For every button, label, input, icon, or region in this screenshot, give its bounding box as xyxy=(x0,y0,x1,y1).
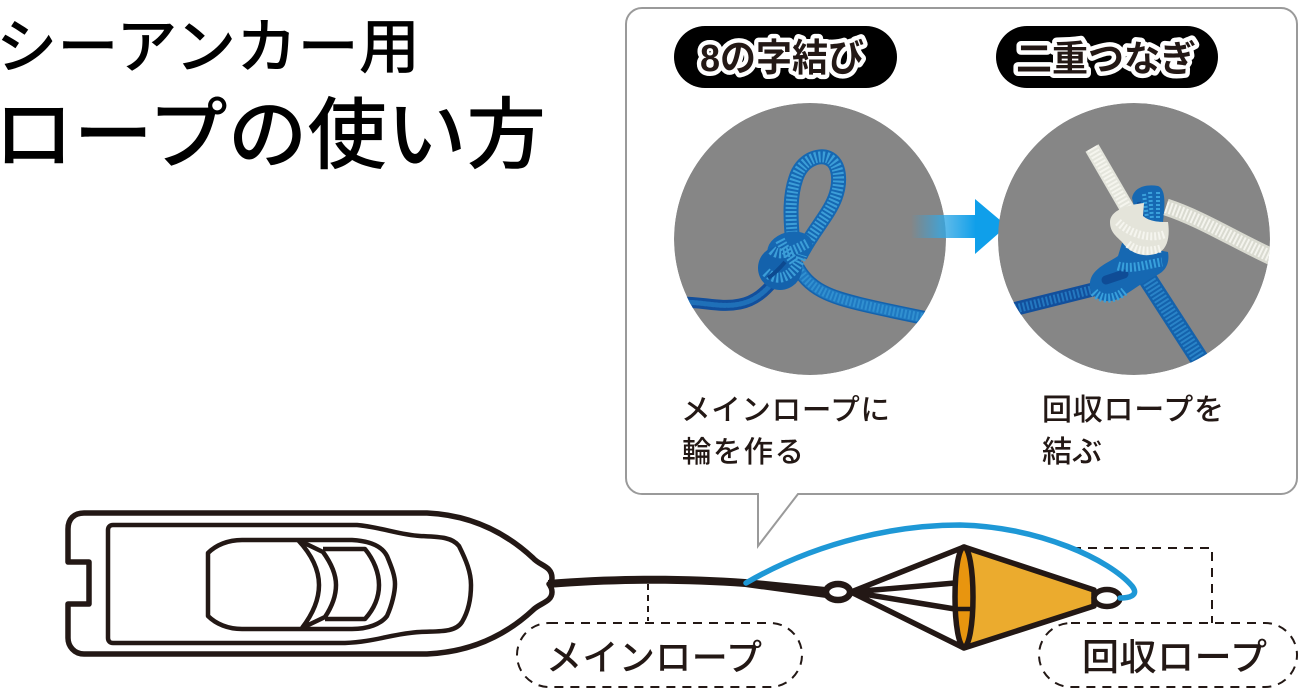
left rope tail xyxy=(680,280,775,305)
leader line: recovery rope xyxy=(1072,548,1212,623)
boat illustration xyxy=(68,513,552,654)
boat hull xyxy=(68,513,552,654)
blue lower knot xyxy=(1090,243,1168,301)
photo: figure-eight knot on grey circle xyxy=(674,103,946,375)
white rope end xyxy=(1092,148,1128,210)
label pill: recovery rope: 回収ロープ xyxy=(1082,637,1267,678)
label pill: main rope: メインロープ xyxy=(546,637,762,678)
knot xyxy=(758,232,812,290)
blue upper loop xyxy=(1132,185,1164,222)
caption: tie recovery rope xyxy=(1042,394,1224,469)
rear rope ring xyxy=(1094,590,1120,606)
callout panel: knot instructions xyxy=(626,8,1297,546)
title xyxy=(0,14,546,179)
caption: tie recovery rope: 結ぶ xyxy=(1042,436,1102,469)
front rope ring xyxy=(826,584,850,600)
title line 2: ロープの使い方 xyxy=(0,91,546,179)
boat cabin xyxy=(208,540,395,629)
heading badge: double connection xyxy=(996,26,1218,88)
label pill: recovery rope xyxy=(1039,623,1297,687)
title line 1: シーアンカー用 xyxy=(0,14,420,81)
label pill: main rope xyxy=(517,623,802,687)
caption: make a loop in main rope: 輪を作る xyxy=(682,436,804,469)
white rope right xyxy=(1166,207,1272,257)
anchor mouth ring xyxy=(955,547,973,647)
blue rope tail right xyxy=(1147,278,1200,360)
caption: make a loop in main rope xyxy=(681,394,890,469)
arrow xyxy=(911,199,1007,254)
boat windshield xyxy=(298,540,379,628)
photo: double connection knot on grey circle xyxy=(998,103,1272,375)
boat deck xyxy=(108,525,471,643)
caption: make a loop in main rope: メインロープに xyxy=(681,394,890,427)
rope loop xyxy=(791,157,839,256)
recovery rope xyxy=(746,525,1135,598)
sea anchor xyxy=(826,547,1120,648)
blue rope tail left xyxy=(1015,289,1095,309)
callout bubble xyxy=(626,8,1297,546)
white knot band xyxy=(1110,203,1169,255)
main rope xyxy=(548,576,826,598)
leader line: main rope xyxy=(647,584,649,621)
sea anchor cone xyxy=(964,547,1094,648)
shroud lines xyxy=(851,547,964,648)
heading badge: double connection: 二重つなぎ xyxy=(1016,38,1196,79)
heading badge: figure-eight knot: 8の字結び xyxy=(700,38,864,80)
caption: tie recovery rope: 回収ロープを xyxy=(1042,394,1224,427)
right rope tail xyxy=(796,264,930,319)
anchor mouth bar xyxy=(955,607,973,611)
heading badge: figure-eight knot xyxy=(674,26,897,88)
